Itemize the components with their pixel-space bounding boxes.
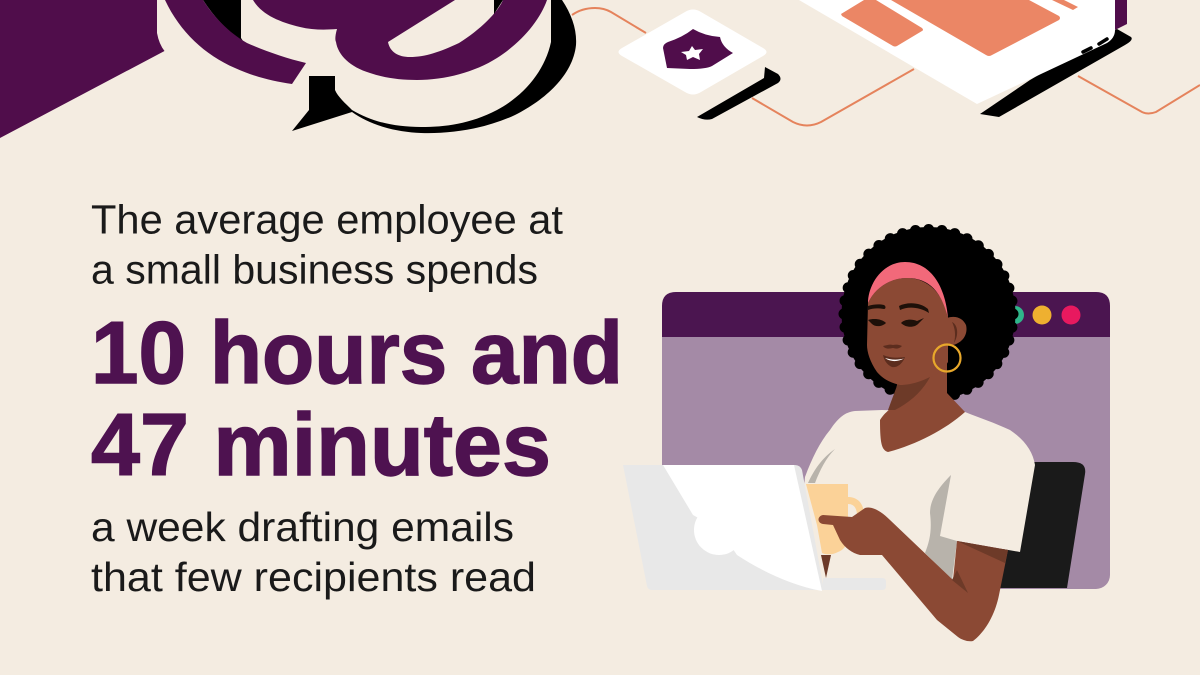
- mouth: [883, 355, 905, 367]
- icon: isometric laptop: [799, 0, 1132, 117]
- eyebrows: [868, 303, 929, 313]
- logo highlight: [694, 505, 744, 555]
- text: outro: a week drafting emails: [91, 504, 514, 550]
- window buttons: [1006, 306, 1080, 324]
- headband: [868, 262, 948, 317]
- text: intro: [91, 196, 564, 292]
- orange panels: [841, 0, 923, 46]
- laptop base shadow: [980, 29, 1132, 117]
- star: [681, 46, 703, 60]
- laptop screen back: [623, 465, 824, 590]
- shield: [663, 29, 733, 69]
- browser window: [662, 292, 1110, 589]
- foreground laptop: [623, 465, 886, 591]
- finger sliver: [821, 555, 831, 578]
- connector lines: [572, 8, 1200, 126]
- isometric purple block, top left: [0, 0, 164, 138]
- ports: [1083, 39, 1107, 52]
- icon: at-sign speech bubble: [165, 0, 576, 133]
- ear: [947, 317, 967, 345]
- headline statistic: 10 hours and: [91, 303, 623, 402]
- text: intro: a small business spends: [91, 246, 538, 292]
- card edge: [697, 67, 780, 120]
- headline statistic: 47 minutes: [91, 395, 551, 494]
- person at laptop: [795, 227, 1035, 641]
- arm and hand: [818, 508, 1008, 641]
- office chair: [990, 462, 1085, 588]
- sleeve shadow: [957, 541, 1008, 563]
- neck shadow: [888, 377, 930, 410]
- nose: [883, 345, 902, 349]
- forearm shadow: [952, 570, 968, 593]
- afro hair: [842, 227, 1016, 401]
- laptop face: [799, 0, 1115, 104]
- coffee mug: [806, 484, 864, 554]
- neck: [880, 360, 965, 452]
- card face: [618, 10, 766, 94]
- laptop base: [823, 578, 886, 590]
- text: intro: The average employee at: [91, 196, 564, 242]
- hoop earring: [934, 344, 960, 372]
- screen highlight: [663, 465, 822, 591]
- laptop lid edge: [1115, 0, 1127, 30]
- face: [867, 278, 948, 385]
- text: outro: [91, 504, 536, 600]
- shirt shadows: [808, 449, 957, 580]
- headline statistic: [91, 303, 623, 494]
- icon: security shield card: [618, 10, 780, 120]
- text: outro: that few recipients read: [91, 554, 536, 600]
- eyes: [868, 318, 924, 327]
- shirt: [795, 410, 1035, 590]
